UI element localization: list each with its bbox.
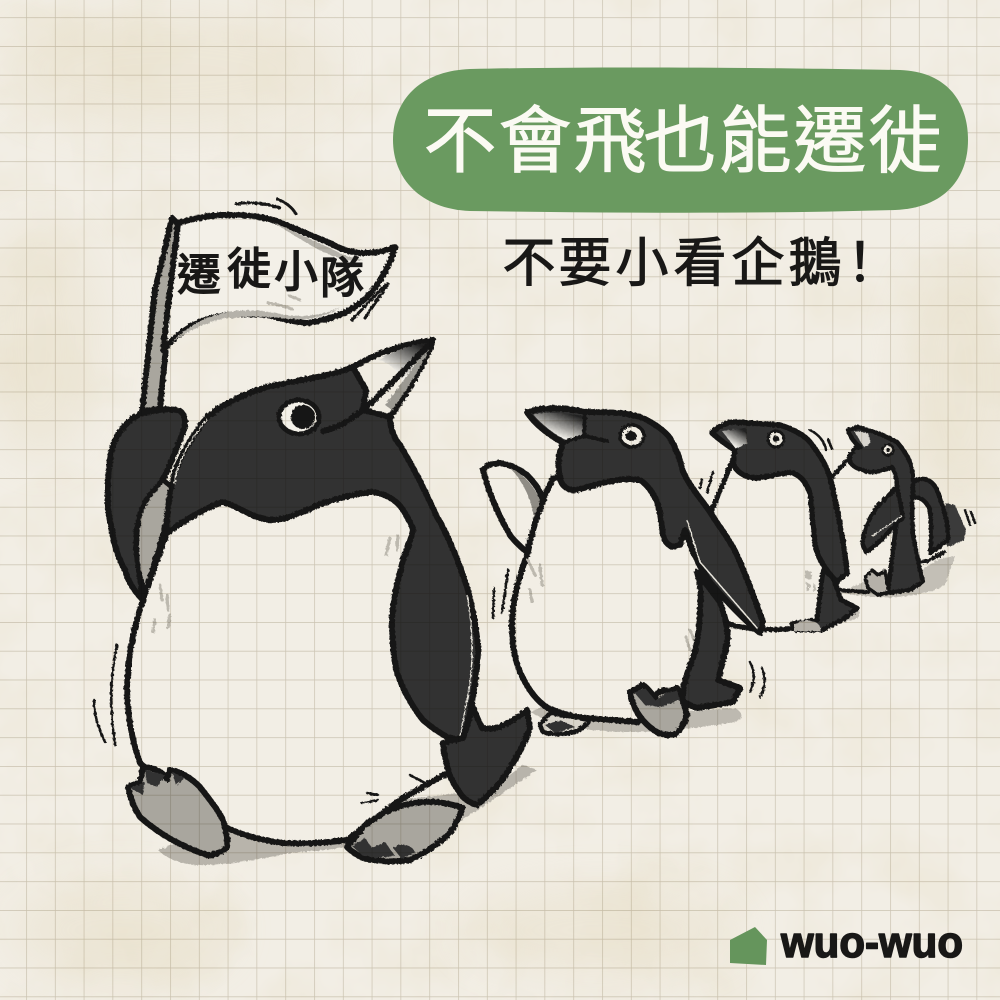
tail fin [443, 707, 530, 805]
penguin 3 [700, 422, 860, 631]
flag text: 徙 [227, 245, 271, 294]
subtitle: 不 [502, 234, 556, 293]
beak [353, 340, 433, 417]
subtitle: 看 [674, 234, 726, 293]
eye [620, 425, 644, 447]
body [127, 460, 475, 843]
flag cloth [163, 215, 395, 350]
flag text: 遷 [177, 251, 221, 300]
right foot [347, 802, 463, 861]
icon: house [730, 927, 767, 965]
subtitle: 要 [558, 234, 612, 293]
raised flipper [483, 463, 542, 552]
highlight lines [174, 419, 472, 736]
logo wordmark: wuo-wuo [780, 918, 963, 967]
eye [279, 400, 319, 434]
flag pole [142, 218, 178, 412]
flag [142, 199, 395, 412]
penguin 1: leader [94, 340, 537, 865]
title text: 遷 [794, 101, 866, 182]
body [512, 470, 710, 722]
title text: 飛 [574, 101, 646, 182]
title banner [393, 67, 968, 213]
motion lines [493, 472, 764, 697]
flag text: 隊 [320, 254, 364, 303]
ground shadow [530, 705, 741, 732]
beak [533, 413, 585, 441]
title text: 會 [498, 101, 572, 182]
subtitle: 小 [616, 234, 668, 293]
head, hood and flipper [527, 408, 763, 633]
title text: 也 [644, 101, 716, 182]
title text: 能 [718, 101, 792, 182]
front foot [630, 685, 687, 735]
flag motion lines [236, 199, 388, 320]
flipper underside [137, 480, 172, 593]
penguin 2 [483, 408, 764, 735]
left foot [128, 767, 227, 855]
subtitle: ！ [834, 234, 886, 293]
ground shadow [158, 765, 537, 865]
motion lines [94, 645, 425, 803]
title text: 徙 [868, 101, 942, 182]
head, hood and wing [167, 367, 478, 739]
subtitle: 鵝 [788, 234, 842, 293]
penguin 4: farthest [832, 427, 975, 597]
back foot [540, 713, 590, 734]
subtitle: 企 [732, 234, 784, 293]
leg [683, 572, 740, 708]
logo [730, 918, 963, 967]
title text: 不 [424, 101, 496, 182]
flag text: 小 [274, 248, 318, 297]
raised flipper [108, 410, 185, 600]
